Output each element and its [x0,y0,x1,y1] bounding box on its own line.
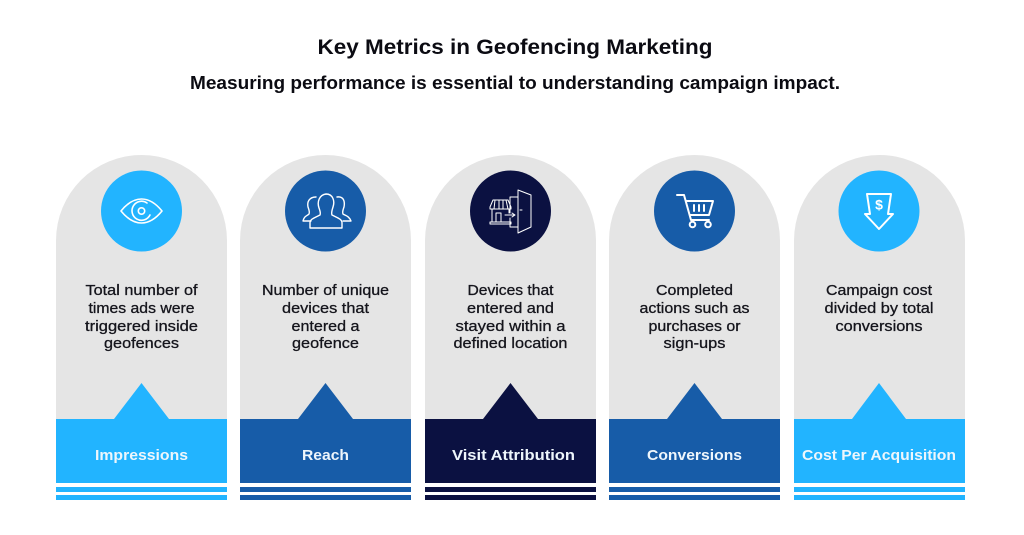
description: reach: devices that [282,300,370,317]
description: impressions: geofences [104,335,179,352]
description: cost per acquisition: conversions [836,318,922,335]
description: conversions: purchases or [648,318,740,335]
label band: conversions [609,383,780,483]
icon: people [303,194,351,228]
description: visit attribution: entered and [467,300,554,317]
icon: shopping cart [677,195,713,227]
panel: cost per acquisition: Cost Per Acquisition [802,447,956,464]
label band: visit attribution [425,383,596,483]
panel: reach: Reach [302,447,349,464]
description: impressions: Total number of [86,282,198,299]
description: visit attribution: stayed within a [456,318,566,335]
icon: store and door [490,190,531,233]
panel: visit attribution: Visit Attribution [452,447,575,464]
description: reach: entered a [292,318,360,335]
panel: reach [240,155,411,500]
description: reach: geofence [292,335,359,352]
panel: impressions [56,155,227,500]
icon: price down arrow: $ [875,196,883,212]
label band: impressions [56,383,227,483]
panel: visit attribution [425,155,596,500]
panel: conversions [609,155,780,500]
description: cost per acquisition: divided by total [824,300,934,317]
description: conversions: sign-ups [664,335,726,352]
label band: cost per acquisition [794,383,965,483]
title: Key Metrics in Geofencing Marketing [318,36,712,59]
subtitle: Measuring performance is essential to understanding campaign impact. [190,73,840,93]
description: reach: Number of unique [262,282,389,299]
icon: price down arrow [865,194,893,229]
description: cost per acquisition: Campaign cost [826,282,933,299]
panel: conversions: Conversions [647,447,742,464]
description: conversions: actions such as [640,300,750,317]
description: impressions: triggered inside [85,318,198,335]
description: visit attribution: defined location [454,335,568,352]
description: visit attribution: Devices that [468,282,554,299]
description: conversions: Completed [656,282,733,299]
description: impressions: times ads were [88,300,194,317]
panel: impressions: Impressions [95,447,188,464]
panel: cost per acquisition [794,155,965,500]
label band: reach [240,383,411,483]
icon: eye [121,199,162,223]
